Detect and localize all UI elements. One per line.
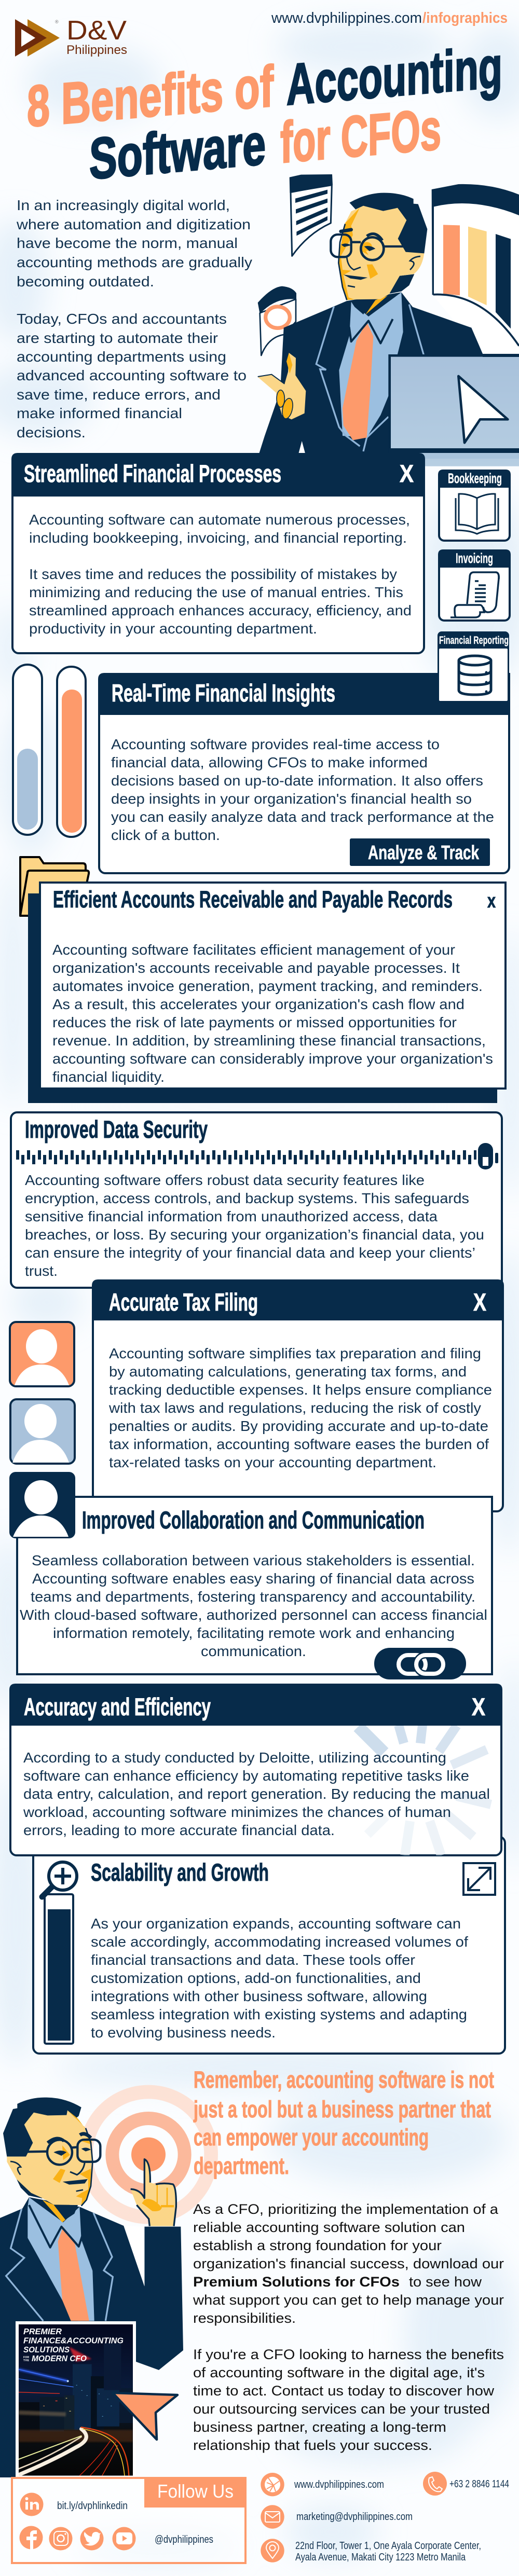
logo: D&V Philippines: D&V <box>66 16 127 46</box>
icon: target rings <box>86 2092 211 2217</box>
logo: D&V Philippines <box>15 16 127 57</box>
intro text: save time, reduce errors, and <box>17 387 221 403</box>
laptop base <box>391 448 519 459</box>
body text: can ensure the integrity of your financial data and keep your clients’ <box>25 1245 475 1261</box>
body text: including bookkeeping, invoicing, and financial reporting. <box>29 530 407 546</box>
heading: Scalability and Growth <box>91 1858 269 1886</box>
body text: sensitive financial information from unauthorized access, data <box>25 1208 438 1224</box>
body text: integrations with other business software, allowing <box>91 1988 427 2004</box>
intro text: accounting methods are gradually <box>17 254 252 270</box>
icon: magnifier <box>42 1862 77 1897</box>
hand <box>258 353 306 420</box>
cover title: MODERN CFO <box>32 2354 87 2363</box>
button: Analyze & Track: Analyze & Track <box>368 842 480 864</box>
heading: Remember callout <box>193 2067 494 2179</box>
body text: Accounting software simplifies tax preparation and filing <box>109 1345 481 1361</box>
body text: It saves time and reduces the possibility of mistakes by <box>29 566 397 582</box>
icon: instagram <box>49 2527 73 2551</box>
body text: communication. <box>201 1643 306 1659</box>
body text: Accounting software provides real-time access to <box>111 736 440 752</box>
website url: www.dvphilippines.com <box>271 10 422 26</box>
title <box>27 34 502 191</box>
closing text: our outsourcing services can be your trusted <box>193 2401 490 2417</box>
body text: scale accordingly, accommodating increased volumes of <box>91 1934 468 1950</box>
shirt <box>339 292 403 437</box>
chart: bars under arch <box>432 184 519 354</box>
body text: Seamless collaboration between various stakeholders is essential. <box>32 1552 475 1568</box>
icon: receipt scroll <box>450 572 499 617</box>
tie <box>58 2227 89 2321</box>
intro text: where automation and digitization <box>16 216 251 232</box>
closing text: of accounting software in the digital age, it's <box>193 2365 485 2380</box>
body text <box>111 736 494 843</box>
icon: facebook <box>20 2526 43 2550</box>
body text: Accounting software enables easy sharing of financial data across <box>32 1571 474 1587</box>
card: Invoicing <box>438 549 511 621</box>
suit <box>0 2197 183 2477</box>
body text <box>91 1916 468 2041</box>
panel: Accurate Tax Filing <box>92 1279 504 1511</box>
body text: click of a button. <box>111 827 220 843</box>
closing text: If you're a CFO looking to harness the benefits <box>193 2347 504 2362</box>
closing text: relationship that fuels your success. <box>193 2437 432 2453</box>
heading: Follow Us <box>157 2481 234 2502</box>
icon: folders <box>20 857 89 916</box>
close mark: x <box>487 890 496 912</box>
closing text: organization's financial success, download our <box>193 2256 504 2271</box>
panel shadow <box>28 893 497 1103</box>
body text: encryption, access controls, and backup systems. This safeguards <box>25 1190 469 1206</box>
logo: D&V Philippines: ® <box>55 19 59 24</box>
body text: workload, accounting software minimizes the chances of human <box>23 1804 451 1820</box>
body text: automates invoice generation, payment tracking, and reminders. <box>52 978 483 994</box>
icon: progress bar <box>45 1894 73 2044</box>
panel: Efficient Accounts Receivable and Payable Records <box>28 883 506 1103</box>
intro text: becoming outdated. <box>17 273 154 290</box>
heading: Remember callout: department. <box>194 2153 289 2179</box>
closing text: what support you can get to help manage your <box>193 2292 504 2308</box>
heading: Accuracy and Efficiency <box>24 1693 211 1720</box>
cover title: FOR <box>23 2356 29 2359</box>
contact list: marketing@dvphilippines.com <box>296 2511 413 2523</box>
card: Invoicing: Invoicing <box>456 550 493 566</box>
tie <box>343 322 373 440</box>
frame: Follow Us <box>12 2477 247 2563</box>
icon: thermometer orange <box>57 667 86 837</box>
body text: decisions based on up-to-date information. It also offers <box>111 773 483 789</box>
address: 22nd Floor, Tower 1, One Ayala Corporate Center, <box>295 2540 481 2552</box>
body text: As a result, this accelerates your organization's cash flow and <box>52 996 465 1012</box>
intro text <box>16 197 252 440</box>
close mark: X <box>400 460 414 487</box>
lapels <box>316 305 424 451</box>
intro text: accounting departments using <box>17 349 226 365</box>
title: Software <box>89 111 266 191</box>
logo: D&V Philippines: Philippines <box>66 43 127 57</box>
icon: website globe <box>261 2473 284 2496</box>
cover title: FINANCE&ACCOUNTING <box>23 2337 124 2345</box>
icon: link pill <box>374 1648 466 1679</box>
address <box>295 2540 481 2563</box>
icon: expand arrows <box>463 1863 495 1895</box>
closing text: business partner, creating a long-term <box>193 2419 446 2435</box>
icon: document bubble <box>290 174 333 256</box>
card: Bookkeeping <box>438 470 511 541</box>
body text: financial transactions and data. These tools offer <box>91 1952 415 1968</box>
contact list <box>261 2472 509 2563</box>
icon: linkedin <box>20 2492 44 2516</box>
cover image <box>19 2324 133 2476</box>
icon: location pin <box>261 2539 284 2563</box>
frame: Follow Us: @dvphilippines <box>155 2534 213 2545</box>
website url: /infographics <box>422 10 508 26</box>
icon: thermometer blue <box>13 665 42 835</box>
zipper <box>16 1143 498 1169</box>
panel: Real-Time Financial Insights <box>98 673 510 873</box>
panel: Scalability and Growth <box>33 1837 505 2054</box>
body text: Accounting software offers robust data security features like <box>25 1172 425 1188</box>
body text: software can enhance efficiency by automating repetitive tasks like <box>23 1768 469 1784</box>
laptop <box>390 354 519 466</box>
body text: deep insights in your organization's financial health so <box>111 791 472 807</box>
intro text: make informed financial <box>17 405 182 421</box>
body text <box>29 512 412 637</box>
book cover: Premier Finance & Accounting Solutions <box>16 2321 136 2477</box>
body text <box>20 1552 487 1659</box>
icon: navy avatar <box>9 1472 75 1538</box>
contact list: www.dvphilippines.com <box>294 2479 384 2490</box>
body text <box>25 1172 484 1279</box>
closing text: reliable accounting software solution can <box>193 2220 465 2235</box>
heading: Accurate Tax Filing <box>109 1288 258 1316</box>
button: Analyze & Track <box>350 838 490 866</box>
intro text: advanced accounting software to <box>17 367 247 383</box>
body text <box>52 942 493 1085</box>
icon: twitter <box>80 2527 104 2551</box>
body text: with tax laws and regulations, reducing the risk of costly <box>108 1400 481 1416</box>
suit <box>258 292 519 457</box>
intro text: Today, CFOs and accountants <box>17 311 227 327</box>
body text: breaches, or loss. By securing your organization’s financial data, you <box>25 1227 484 1243</box>
body text: customization options, add-on functionalities, and <box>91 1970 421 1986</box>
closing text: responsibilities. <box>193 2310 296 2326</box>
shirt <box>28 2197 94 2321</box>
body text: tax-related tasks on your accounting department. <box>109 1454 436 1470</box>
icon: circle bubble <box>258 286 296 355</box>
address: Ayala Avenue, Makati City 1223 Metro Manila <box>295 2552 466 2563</box>
body text: information remotely, facilitating remote work and enhancing <box>53 1625 455 1641</box>
body text: productivity in your accounting department. <box>29 621 317 637</box>
heading: Streamlined Financial Processes <box>24 460 281 487</box>
icon: cursor arrow <box>458 376 508 443</box>
website url <box>271 10 508 26</box>
closing text: time to act. Contact us today to discover how <box>193 2383 495 2399</box>
body text: With cloud-based software, authorized personnel can access financial <box>20 1607 487 1623</box>
illustration: CFO pointing at target <box>0 2092 211 2477</box>
panel: Accuracy and Efficiency <box>9 1684 502 1855</box>
lapels <box>6 2209 113 2321</box>
title: 8 Benefits of <box>27 53 274 139</box>
body text: tax information, accounting software eases the burden of <box>109 1436 489 1452</box>
frame: Follow Us: bit.ly/dvphlinkedin <box>57 2500 128 2512</box>
body text: financial liquidity. <box>52 1069 165 1085</box>
panel: Improved Data Security <box>11 1112 502 1288</box>
body text: data entry, calculation, and report generation. By reducing the manual <box>23 1786 490 1802</box>
body text: revenue. In addition, by streamlining these financial transactions, <box>52 1032 486 1049</box>
icon: open book <box>456 494 498 534</box>
closing text: As a CFO, prioritizing the implementation of a <box>193 2201 499 2217</box>
body text: errors, leading to more accurate financial data. <box>23 1822 335 1838</box>
body text: organization's accounts receivable and payable processes. It <box>52 960 460 976</box>
body text: minimizing and reducing the use of manual entries. This <box>29 584 403 600</box>
intro text: decisions. <box>17 424 86 440</box>
illustration: CFO with charts and laptop <box>258 174 519 466</box>
icon: orange cursor <box>113 2393 177 2440</box>
body text: by automating calculations, generating tax forms, and <box>109 1363 467 1380</box>
intro text: have become the norm, manual <box>17 235 238 251</box>
icon: youtube <box>112 2527 136 2551</box>
body text: According to a study conducted by Deloitte, utilizing accounting <box>23 1750 446 1766</box>
head <box>331 193 427 300</box>
heading: Real-Time Financial Insights <box>112 679 335 707</box>
body text: teams and departments, fostering transparency and accountability. <box>31 1589 475 1605</box>
body text: penalties or audits. By providing accurate and up-to-date <box>109 1418 488 1434</box>
icon: mail <box>261 2505 284 2529</box>
panel: Streamlined Financial Processes <box>11 453 425 653</box>
hand <box>131 2159 176 2226</box>
body text: reduces the risk of late payments or missed opportunities for <box>52 1014 457 1030</box>
closing text: Premium Solutions for CFOs <box>193 2274 400 2290</box>
body text: financial data, allowing CFOs to make informed <box>111 754 428 770</box>
closing text <box>193 2201 504 2453</box>
body text: seamless integration with existing systems and adapting <box>91 2006 467 2022</box>
cover title: THE <box>23 2359 30 2362</box>
cover title <box>23 2327 124 2363</box>
closing text: establish a strong foundation for your <box>193 2238 442 2253</box>
close mark: X <box>472 1693 485 1720</box>
body text: As your organization expands, accounting software can <box>91 1916 461 1932</box>
body text: Accounting software facilitates efficient management of your <box>52 942 455 958</box>
cover title: PREMIER <box>23 2327 62 2336</box>
body text: tracking deductible expenses. It helps ensure compliance <box>109 1382 492 1398</box>
icon: database <box>459 656 491 695</box>
icon: orange avatar <box>10 1322 74 1386</box>
icon: blue avatar <box>10 1399 75 1464</box>
close mark: X <box>473 1288 486 1316</box>
icon: phone <box>423 2472 447 2496</box>
intro text: are starting to automate their <box>17 330 218 346</box>
body text: accounting software can considerably improve your organization's <box>52 1051 493 1067</box>
body text: trust. <box>25 1263 58 1279</box>
body text: you can easily analyze data and track performance at the <box>111 809 494 825</box>
body text: Accounting software can automate numerous processes, <box>29 512 410 528</box>
body text <box>108 1345 492 1470</box>
body text <box>23 1750 490 1838</box>
closing text: to see how <box>409 2274 482 2290</box>
head <box>3 2098 100 2206</box>
intro text: In an increasingly digital world, <box>17 197 230 213</box>
cover title: SOLUTIONS <box>23 2346 70 2354</box>
heading: Improved Data Security <box>25 1115 208 1143</box>
panel: Improved Collaboration and Communication <box>17 1497 492 1679</box>
body text: to evolving business needs. <box>91 2024 276 2041</box>
sunburst rays <box>358 1725 491 1855</box>
card: Financial Reporting <box>438 631 509 702</box>
body text: streamlined approach enhances accuracy, efficiency, and <box>29 602 412 618</box>
